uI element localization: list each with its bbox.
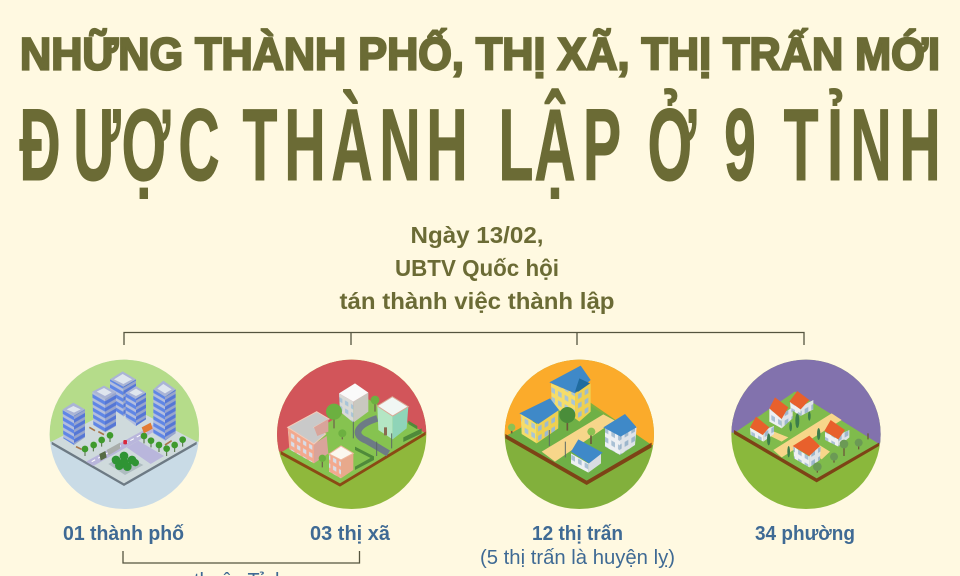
icon: town	[273, 357, 430, 513]
intro text	[340, 222, 614, 314]
icon: township	[503, 357, 660, 513]
label: ward: 34 phường	[755, 522, 855, 545]
icon: city	[47, 357, 203, 513]
label: town: 03 thị xã	[310, 522, 391, 545]
connector bracket top	[124, 332, 804, 345]
connector bracket bottom	[123, 551, 360, 563]
title	[19, 28, 941, 202]
label: township: 12 thị trấn	[532, 522, 623, 545]
title line 2: ĐƯỢC THÀNH LẬP Ở 9 TỈNH	[19, 87, 941, 202]
intro line 1: Ngày 13/02,	[410, 222, 544, 248]
title line 1: NHỮNG THÀNH PHỐ, THỊ XÃ, THỊ TRẤN MỚI	[20, 28, 940, 80]
label: township note: (5 thị trấn là huyện lỵ)	[480, 546, 675, 569]
label: city: 01 thành phố	[63, 522, 184, 545]
intro line 3: tán thành việc thành lập	[340, 288, 614, 314]
category labels	[63, 522, 855, 569]
intro line 2: UBTV Quốc hội	[395, 255, 559, 281]
icon: ward	[731, 360, 881, 509]
